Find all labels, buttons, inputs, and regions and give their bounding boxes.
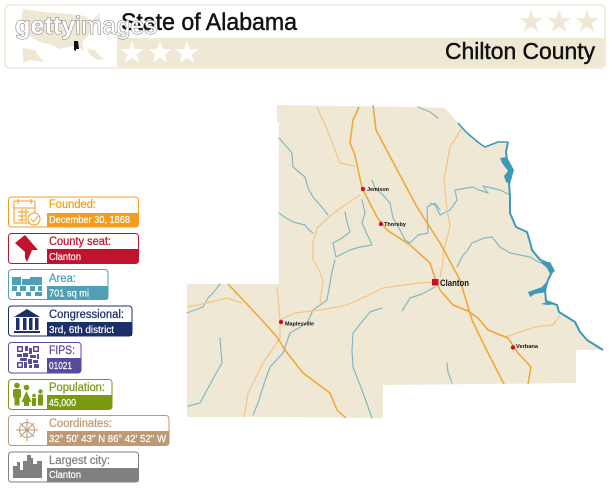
icon: US map locator bbox=[21, 9, 104, 63]
header banner bbox=[5, 5, 605, 68]
panel: county seat bbox=[8, 234, 138, 264]
rivers and creeks bbox=[187, 107, 540, 418]
city: Thorsby: Thorsby bbox=[384, 222, 406, 228]
icon: county shape bbox=[15, 235, 38, 262]
city: Maplesville bbox=[279, 320, 314, 328]
panel: coordinates: 32° 50' 43'' N 86° 42' 52'' W bbox=[49, 434, 167, 445]
panel: largest city bbox=[8, 452, 138, 482]
panel: FIPS: FIPS: bbox=[49, 345, 75, 357]
panel: population: 45,000 bbox=[49, 398, 76, 409]
watermark: gettyimages: gettyimages bbox=[15, 12, 157, 40]
city: Thorsby bbox=[379, 222, 406, 228]
county land bbox=[187, 105, 603, 418]
city: Clanton bbox=[432, 278, 469, 288]
panel: population: Population: bbox=[49, 382, 105, 394]
Coosa river bbox=[458, 123, 603, 350]
panel: county seat: Clanton bbox=[49, 252, 81, 263]
panel: founded: Founded: bbox=[49, 199, 96, 211]
icon: capitol building bbox=[14, 309, 40, 333]
city: Jemison bbox=[361, 187, 389, 193]
icon: QR code bbox=[17, 346, 39, 368]
stars right bbox=[520, 10, 598, 32]
panel: congressional bbox=[8, 306, 132, 336]
panel: area bbox=[8, 270, 108, 300]
panel: coordinates bbox=[8, 416, 169, 446]
panel: largest city: Clanton bbox=[49, 470, 81, 481]
main roads bbox=[228, 105, 531, 418]
icon: area grid bbox=[12, 277, 42, 296]
icon: skyline bbox=[13, 455, 42, 478]
map: Chilton County bbox=[187, 105, 603, 418]
city: Maplesville: Maplesville bbox=[285, 322, 314, 328]
icon: compass rose bbox=[16, 419, 38, 441]
title: State of Alabama bbox=[121, 9, 298, 36]
panel: congressional: 3rd, 6th district bbox=[49, 325, 114, 336]
panel: county seat: County seat: bbox=[49, 236, 111, 248]
panel: founded: December 30, 1868 bbox=[49, 215, 130, 226]
panel: FIPS: 01021 bbox=[49, 361, 72, 372]
subtitle: Chilton County bbox=[445, 38, 595, 64]
light roads bbox=[187, 107, 560, 417]
panel: founded bbox=[8, 197, 138, 227]
panel: largest city: Largest city: bbox=[49, 455, 110, 467]
city: Verbana: Verbana bbox=[516, 344, 538, 350]
stars left bbox=[121, 41, 198, 63]
panel: FIPS bbox=[8, 342, 81, 373]
panel: congressional: Congressional: bbox=[49, 309, 124, 321]
icon: calendar bbox=[14, 199, 40, 225]
panel: area: Area: bbox=[49, 273, 76, 285]
city: Clanton: Clanton bbox=[440, 278, 469, 288]
icon: family bbox=[13, 383, 43, 406]
panel: population bbox=[8, 380, 112, 410]
panel: coordinates: Coordinates: bbox=[49, 418, 112, 430]
panel: area: 701 sq mi bbox=[49, 288, 89, 300]
city: Jemison: Jemison bbox=[367, 187, 389, 193]
